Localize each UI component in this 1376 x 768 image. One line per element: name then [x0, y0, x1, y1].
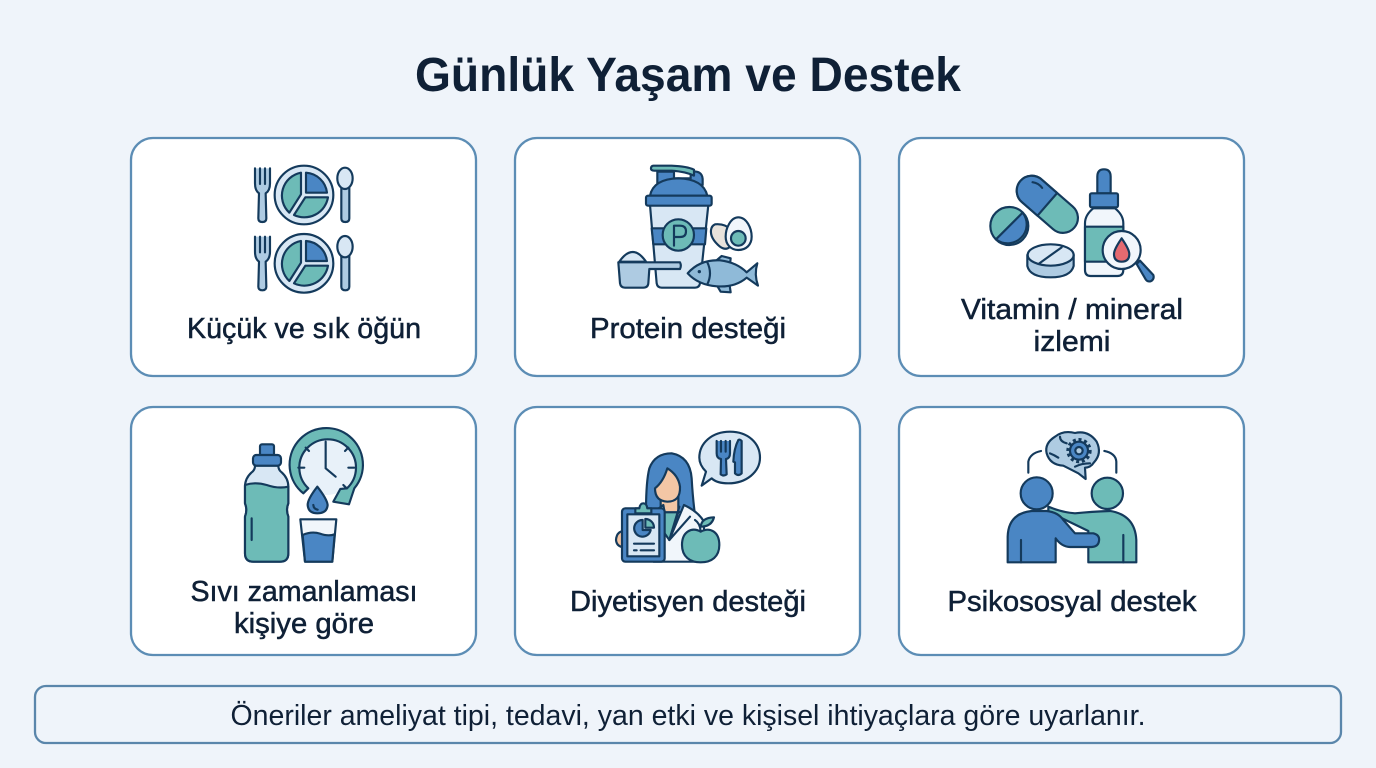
panel: diyetisyen desteği — [515, 407, 860, 655]
icon: protein shaker, scoop, egg and fish — [618, 166, 758, 292]
title: Günlük Yaşam ve Destek — [415, 48, 962, 102]
panel: küçük ve sık öğün — [131, 138, 476, 376]
panel: protein desteği — [515, 138, 860, 376]
panel: sıvı zamanlaması — [131, 407, 476, 655]
label — [961, 294, 1183, 358]
label: Protein desteği — [590, 313, 786, 345]
panel: psikososyal destek — [899, 407, 1244, 655]
panel: vitamin / mineral izlemi — [899, 138, 1244, 376]
footer note — [35, 686, 1341, 743]
label: kişiye göre — [234, 608, 374, 640]
label — [190, 576, 418, 640]
icon: plates and cutlery — [255, 166, 353, 293]
footer note: Öneriler ameliyat tipi, tedavi, yan etki ve kişisel ihtiyaçlara göre uyarlanır. — [230, 700, 1146, 732]
label: Sıvı zamanlaması — [190, 576, 418, 608]
label: Psikososyal destek — [948, 586, 1197, 618]
label: izlemi — [1034, 326, 1110, 358]
label: Küçük ve sık öğün — [187, 313, 421, 345]
icon: bottle, clock, water drop and glass — [245, 428, 363, 562]
label: Vitamin / mineral — [961, 294, 1183, 326]
icon: pills, dropper bottle and magnifier — [990, 169, 1154, 281]
icon: dietitian with clipboard, apple and speech bubble — [616, 432, 760, 562]
icon: two people with brain and gear — [1008, 432, 1136, 562]
label: Diyetisyen desteği — [570, 586, 806, 618]
